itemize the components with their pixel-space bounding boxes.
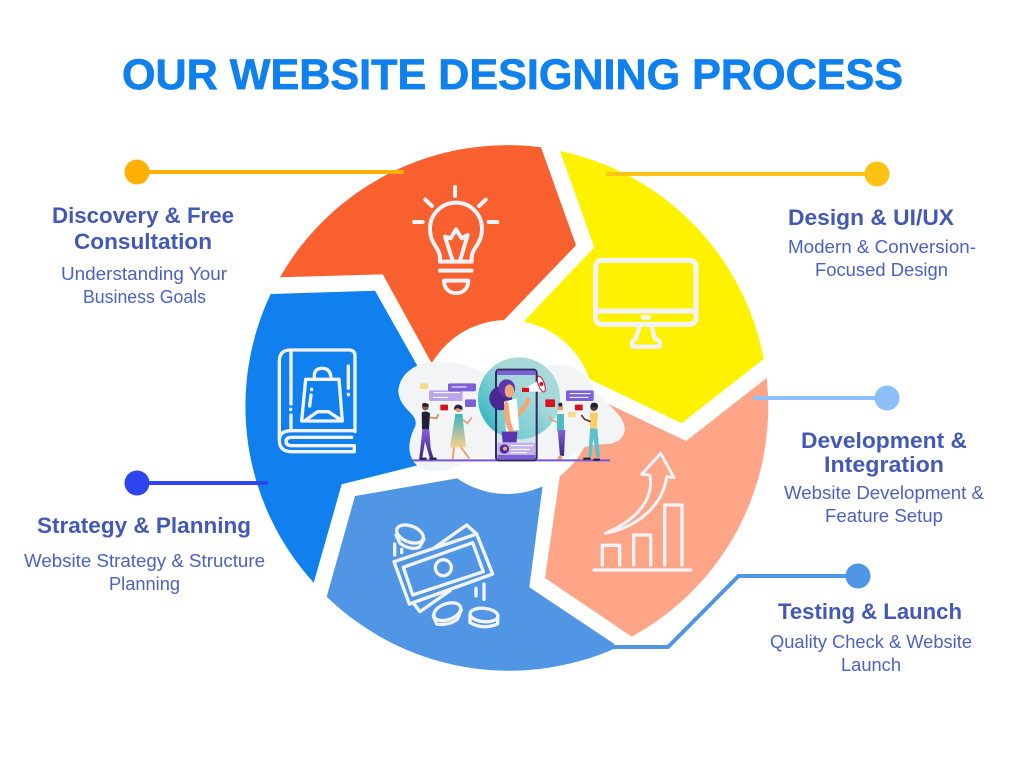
phone (496, 370, 537, 460)
connector: testing (606, 564, 870, 647)
woman with megaphone (489, 375, 547, 442)
label: development: Integration (824, 452, 944, 477)
label: testing: Testing & Launch (778, 599, 962, 624)
background blob (398, 362, 625, 471)
icon: book with shopping bag (279, 350, 355, 452)
label: development: Development & (801, 428, 967, 453)
label: discovery (52, 203, 234, 307)
person 1 (419, 403, 438, 459)
teal circle (478, 357, 560, 439)
title: OUR WEBSITE DESIGNING PROCESS (122, 51, 903, 99)
label: testing (770, 599, 972, 675)
label: design: Design & UI/UX (788, 205, 954, 230)
label: strategy: Website Strategy & Structure (24, 551, 265, 571)
label: discovery: Consultation (74, 229, 212, 254)
label: design (788, 205, 976, 280)
ground line (412, 457, 610, 463)
segment: discovery (orange) (280, 145, 576, 380)
label: development: Feature Setup (825, 506, 943, 526)
label: testing: Quality Check & Website (770, 632, 972, 652)
label: development (784, 428, 984, 526)
label: discovery: Discovery & Free (52, 203, 234, 228)
connector: discovery (124, 160, 402, 184)
connector: development (755, 386, 900, 410)
label: strategy: Strategy & Planning (37, 513, 251, 538)
icon: light bulb (414, 187, 497, 293)
label: strategy (24, 513, 265, 594)
icon: money and coins (394, 521, 499, 627)
label: design: Focused Design (815, 260, 948, 280)
icon: growth chart (594, 453, 691, 570)
person 2 (450, 405, 472, 459)
label: discovery: Business Goals (83, 287, 206, 307)
connector: strategy (124, 470, 266, 496)
label: development: Website Development & (784, 483, 984, 503)
chat bubbles (420, 383, 594, 417)
icon: monitor (596, 260, 696, 347)
centre white circle (420, 320, 594, 494)
segment: strategy (blue) (245, 291, 431, 583)
label: discovery: Understanding Your (61, 264, 227, 284)
person 4 (581, 403, 600, 460)
central illustration (398, 357, 625, 471)
person 3 (549, 403, 565, 459)
segment: design (yellow) (500, 151, 764, 423)
segment: development (peach) (545, 378, 768, 637)
label: design: Modern & Conversion- (788, 237, 976, 257)
label: strategy: Planning (109, 574, 180, 594)
label: testing: Launch (841, 655, 901, 675)
connector: design (608, 162, 890, 186)
segment: testing (mid blue) (327, 470, 616, 671)
